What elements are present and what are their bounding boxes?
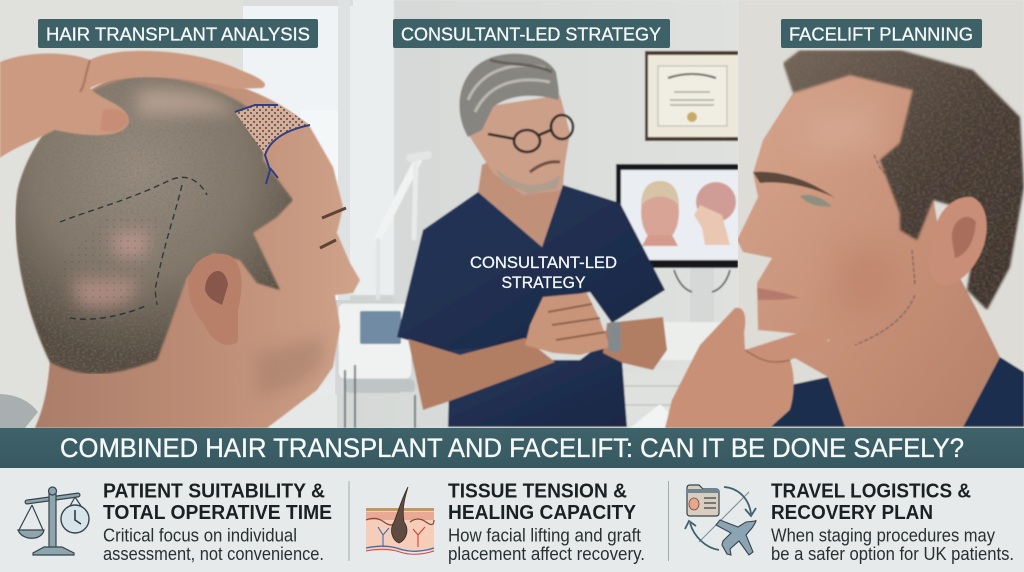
- text block: When staging procedures may: [771, 526, 995, 546]
- hair: [459, 54, 559, 137]
- arms: [408, 293, 667, 410]
- doctor mouth and nose shading: [530, 162, 560, 172]
- marking line: [855, 155, 915, 345]
- label: hair transplant analysis: HAIR TRANSPLANT ANALYSIS: [46, 24, 310, 44]
- label: facelift planning: FACELIFT PLANNING: [789, 24, 973, 44]
- icon: skin cross-section with hair: [366, 487, 434, 554]
- heading: HEALING CAPACITY: [448, 502, 637, 524]
- heading: TRAVEL LOGISTICS &: [771, 480, 971, 502]
- ear: [188, 254, 242, 345]
- hand on chin and white cuff: [630, 308, 829, 428]
- brow and eye: [320, 208, 346, 248]
- cheek shading: [844, 255, 876, 294]
- icon: folder, plane and cycle arrows: [685, 485, 756, 555]
- panel: patient suitability: [18, 480, 332, 564]
- neck and face: [478, 162, 564, 248]
- lamp arm: [378, 155, 428, 298]
- text on scrub: [470, 253, 617, 292]
- panel: middle consultant photo: [335, 0, 738, 428]
- glasses: [488, 115, 573, 152]
- text block: How facial lifting and graft: [448, 526, 641, 546]
- hand: [0, 51, 265, 158]
- framed diploma: [645, 51, 738, 141]
- label: consultant-led strategy: CONSULTANT-LED STRATEGY: [401, 24, 661, 44]
- heading: [771, 480, 971, 524]
- panel: travel logistics: [685, 480, 1014, 564]
- cabinet and keyboard: [624, 322, 720, 406]
- head: [16, 70, 360, 428]
- panel: tissue tension: [366, 480, 645, 564]
- navy scrub: [770, 357, 1024, 427]
- text block: [448, 526, 645, 564]
- heading: TOTAL OPERATIVE TIME: [103, 502, 332, 524]
- text block: placement affect recovery.: [448, 544, 645, 564]
- icon: scales and clock: [18, 487, 89, 555]
- stubble: [255, 335, 325, 398]
- text on scrub: STRATEGY: [502, 273, 586, 292]
- heading: [448, 480, 637, 524]
- scrub top: [397, 185, 665, 355]
- heading: [103, 480, 332, 524]
- text block: [771, 526, 1014, 564]
- label: hair transplant analysis: [38, 19, 318, 48]
- heading: TISSUE TENSION &: [448, 480, 627, 502]
- window: [243, 0, 353, 428]
- hair: [783, 50, 1024, 310]
- title banner: [0, 428, 1024, 468]
- heading: PATIENT SUITABILITY &: [103, 480, 325, 502]
- panel: right facelift photo: [737, 0, 1024, 428]
- text block: [103, 526, 324, 564]
- mouth: [757, 288, 800, 300]
- label: facelift planning: [781, 19, 982, 48]
- panel: left hair transplant photo: [0, 0, 360, 428]
- hair: [16, 77, 293, 374]
- text block: assessment, not convenience.: [103, 544, 324, 564]
- title banner: COMBINED HAIR TRANSPLANT AND FACELIFT: CAN IT BE DONE SAFELY?: [60, 433, 964, 463]
- heading: RECOVERY PLAN: [771, 502, 933, 524]
- graft patch: [62, 215, 158, 318]
- text block: Critical focus on individual: [103, 526, 297, 546]
- label: consultant-led strategy: [393, 19, 670, 48]
- chair: [0, 394, 38, 428]
- doctor: [397, 54, 667, 427]
- ear: [936, 196, 988, 280]
- text on scrub: CONSULTANT-LED: [470, 253, 617, 272]
- donor dashed lines: [60, 177, 207, 319]
- medical device: [338, 304, 417, 428]
- marked hairline area: [235, 105, 310, 184]
- monitor with facial diagrams: [615, 163, 738, 294]
- eye and brow: [753, 172, 835, 207]
- watch: [608, 322, 621, 352]
- clasped hands: [525, 293, 610, 355]
- neck and face: [737, 72, 1000, 427]
